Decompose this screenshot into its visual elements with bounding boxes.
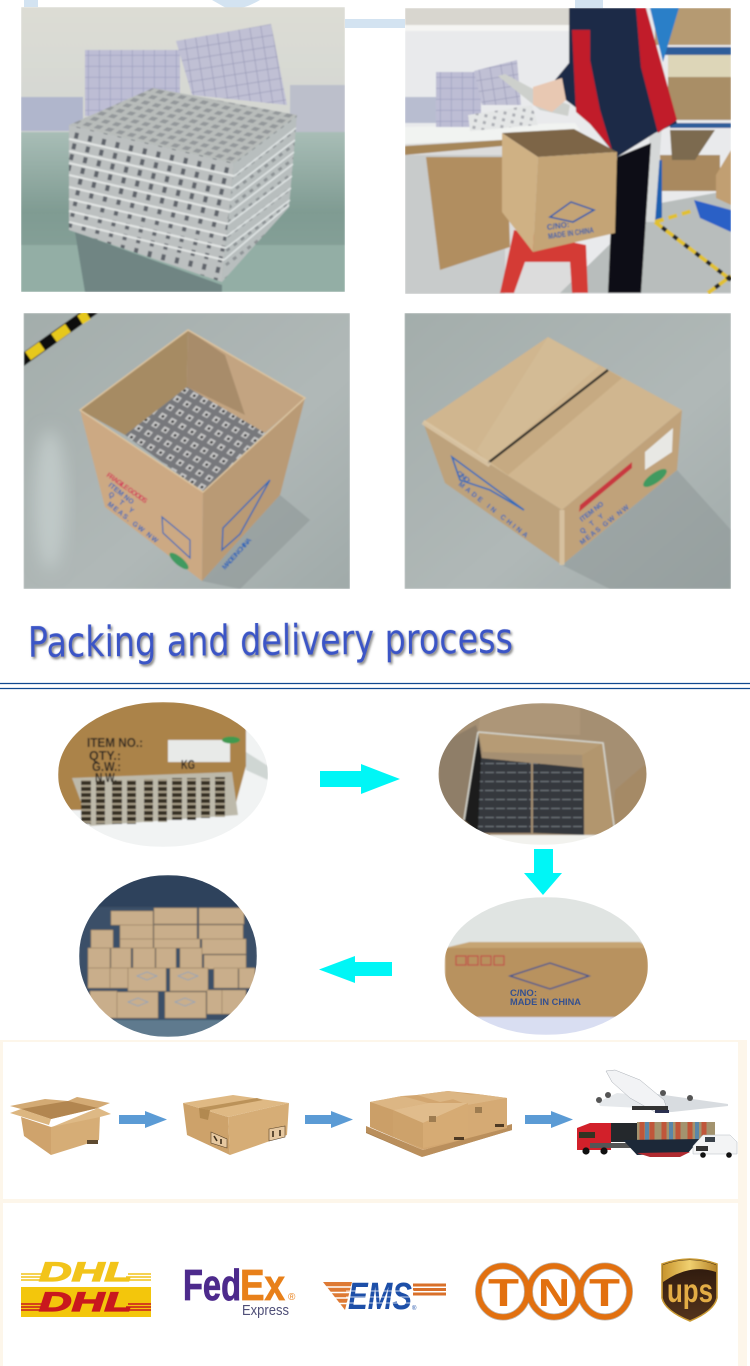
step 3 photo: sealed carton: MADE IN CHINA [510, 997, 582, 1007]
arrow: step 2 to 3 [524, 849, 562, 895]
logo: EMS [323, 1276, 446, 1318]
logo: FedEx Express: Express [242, 1302, 289, 1319]
step 1 photo: tray against labelled carton [58, 702, 268, 847]
step 3 photo: sealed carton: C/NO: [510, 988, 537, 998]
arrow: step 1 to 2 [320, 764, 400, 794]
photo: sealed carton on warehouse floor: ITEM NO [579, 500, 606, 524]
step 1 photo: tray against labelled carton: ITEM NO.: [87, 735, 143, 750]
step 1 photo: tray against labelled carton: G.W.: [92, 759, 121, 774]
cream bordered panels behind shipping rows [0, 1040, 747, 1366]
photo: worker packing trays into carton: MADE IN CHINA [548, 226, 595, 241]
arrow: step 3 to 4 [319, 956, 392, 983]
step 4 photo: cartons loaded in container [79, 875, 257, 1037]
photo: open carton filled with trays: FRAGILE GOODS [105, 472, 148, 505]
icon: cartons on a pallet [366, 1091, 512, 1157]
logo: FedEx Express: ® [288, 1292, 296, 1303]
photo: stack of plastic trays on table [21, 7, 345, 292]
icon: open cardboard box [10, 1097, 111, 1155]
photo: open carton filled with trays: ITEM NO [107, 482, 135, 506]
logo: UPS shield: ups [667, 1272, 713, 1309]
logo: EMS: ® [412, 1305, 417, 1312]
logo: TNT: T [589, 1272, 620, 1315]
arrow: process 2 [305, 1111, 353, 1128]
photo: open carton filled with trays: QTY [107, 491, 135, 515]
photo: sealed carton on warehouse floor [404, 313, 731, 589]
upper DHL: DHL [39, 1257, 132, 1287]
logo: TNT [478, 1266, 630, 1317]
step 1 photo: tray against labelled carton: QTY.: [89, 748, 121, 763]
logo: TNT: T [488, 1272, 519, 1315]
photo: open carton filled with trays: MEAS. GW NW [106, 501, 159, 545]
logo: TNT: N [538, 1272, 570, 1315]
step 1 photo: tray against labelled carton: N.W. [95, 770, 117, 785]
photo: open carton filled with trays: MADE IN CHINA [221, 537, 253, 571]
step 1 photo: tray against labelled carton: KG [181, 757, 195, 772]
logo: EMS: EMS [348, 1276, 412, 1318]
decorative pale blue background shapes [24, 0, 603, 28]
photo: sealed carton on warehouse floor: MADE IN CHINA [457, 481, 529, 540]
icon: plane, truck, ship and van [577, 1070, 737, 1158]
step 3 photo: sealed carton [444, 897, 648, 1035]
logo: FedEx Express: Ex [240, 1261, 285, 1310]
logo: FedEx Express [183, 1261, 296, 1319]
arrow: process 1 [119, 1111, 167, 1128]
lower DHL on yellow: DHL [39, 1287, 132, 1317]
title: Packing and delivery process [28, 614, 513, 667]
photo: sealed carton on warehouse floor: MEAS GW NW [579, 504, 631, 547]
step 2 photo: trays inside open carton [438, 703, 650, 845]
double divider [0, 684, 750, 688]
photo: open carton filled with trays [24, 313, 350, 589]
arrow: process 3 [525, 1111, 573, 1128]
logo: UPS shield [662, 1259, 717, 1321]
photo: sealed carton on warehouse floor: C/NO: [455, 470, 472, 485]
photo: sealed carton on warehouse floor: QTY [579, 513, 606, 536]
logo: FedEx Express: Fed [183, 1261, 241, 1310]
photo: worker packing trays into carton: C/NO: [546, 220, 570, 232]
photo: worker packing trays into carton [405, 8, 731, 294]
icon: sealed cardboard box [183, 1095, 289, 1155]
logo: DHL pair [21, 1257, 151, 1317]
